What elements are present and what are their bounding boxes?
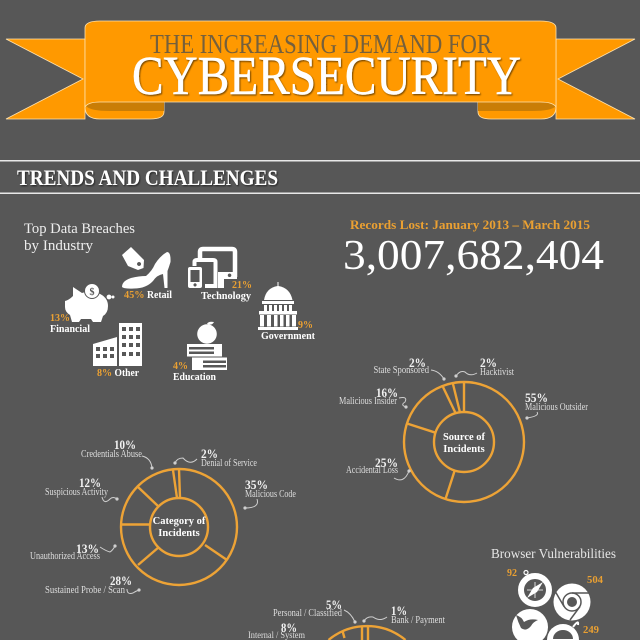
records lost heading: Records Lost: January 2013 – March 2015 [350, 217, 590, 232]
donut: category of incidents: Incidents [158, 528, 200, 539]
donut: third chart cropped at page edge [248, 597, 445, 640]
title banner [6, 21, 635, 119]
label: 2% state sponsored: 2% [409, 355, 426, 370]
label: 2% hacktivist: 2% [480, 355, 497, 370]
heading: top data breaches [24, 221, 135, 254]
heading: top data breaches: Top Data Breaches [24, 221, 135, 237]
label: 13% unauthorized access: 13% [76, 541, 99, 556]
label: 2% denial of service [175, 446, 257, 469]
label: 35% malicious code: Malicious Code [245, 489, 296, 500]
label: 10% credentials abuse [81, 437, 152, 468]
label: 12% suspicious activity: Suspicious Activity [45, 487, 109, 498]
records lost [343, 217, 604, 279]
label: 12% suspicious activity [45, 475, 117, 502]
heading: Browser Vulnerabilities [491, 547, 616, 562]
fold shadows [86, 102, 556, 111]
label: 35% malicious code [245, 477, 296, 508]
label: 2% denial of service: Denial of Service [201, 458, 257, 469]
banner main [85, 21, 556, 107]
label: 1% bank payment: 1% [391, 603, 407, 618]
label: 16% malicious insider: Malicious Insider [339, 396, 397, 407]
label: 55% malicious outsider [525, 390, 588, 418]
label: 5% personal classified: 5% [326, 597, 342, 612]
donut: source of incidents [339, 355, 588, 502]
financial: $ [90, 287, 94, 298]
financial [50, 284, 114, 335]
other label: 8% Other [97, 368, 140, 379]
right fold [478, 100, 556, 119]
icon: safari [521, 570, 549, 604]
label: 28% sustained probe: Sustained Probe / Scan [45, 585, 126, 596]
technology [188, 249, 252, 302]
label: 5% personal classified: Personal / Classified [273, 608, 343, 619]
browser values: 92 [507, 568, 517, 579]
label: 25% accidental loss: Accidental Loss [346, 465, 398, 476]
title line two: CYBERSECURITY [132, 45, 521, 106]
retail [122, 247, 172, 301]
label: 13% unauthorized access: Unauthorized Access [30, 551, 100, 562]
heading: top data breaches: by Industry [24, 238, 93, 254]
label: 8% internal system [248, 620, 306, 640]
icon: apple and books [197, 324, 217, 344]
education: Education [173, 372, 216, 383]
education [173, 322, 227, 383]
label: 16% malicious insider: 16% [376, 385, 398, 400]
browser vulnerabilities [491, 547, 616, 640]
financial labels: 13% [50, 313, 70, 324]
icon: price tag [122, 247, 144, 270]
label: 16% malicious insider [339, 385, 406, 407]
icon: high heel [122, 252, 171, 289]
icon: internet explorer [547, 622, 579, 640]
icon: firefox [512, 609, 548, 640]
title line one: THE INCREASING DEMAND FOR [150, 29, 492, 59]
icon: capitol [264, 282, 292, 300]
education labels: 4% [173, 361, 188, 372]
icon: devices [200, 249, 235, 277]
banner left tail [6, 39, 85, 119]
label: 5% personal classified [273, 597, 355, 622]
label: 8% internal system: 8% [281, 620, 297, 635]
label: 1% bank payment: Bank / Payment [391, 615, 445, 626]
financial: Financial [50, 324, 90, 335]
label: 55% malicious outsider: 55% [525, 390, 548, 405]
technology: Technology [201, 291, 251, 302]
label: 2% state sponsored [374, 355, 444, 379]
icon: chrome [554, 584, 590, 620]
government: Government [261, 331, 316, 342]
label: 1% bank payment [364, 603, 445, 626]
label: 12% suspicious activity: 12% [79, 475, 101, 490]
other [93, 323, 142, 379]
label: 35% malicious code: 35% [245, 477, 268, 492]
government labels: 9% [298, 320, 313, 331]
label: 2% hacktivist: Hacktivist [480, 367, 514, 378]
label: 13% unauthorized access [30, 541, 115, 562]
label: 28% sustained probe: 28% [110, 573, 132, 588]
label: 55% malicious outsider: Malicious Outsider [525, 402, 588, 413]
government [258, 282, 316, 342]
icon: buildings [119, 323, 142, 366]
label: 25% accidental loss [346, 455, 409, 480]
records lost number: 3,007,682,404 [343, 233, 604, 279]
label: 2% state sponsored: State Sponsored [374, 365, 430, 376]
donut centre label: Source of [443, 432, 486, 443]
technology labels: 21% [232, 280, 252, 291]
label: 28% sustained probe [45, 573, 139, 596]
label: 2% hacktivist [456, 355, 514, 378]
left fold [85, 100, 164, 119]
section heading: TRENDS AND CHALLENGES [17, 165, 278, 190]
label: 25% accidental loss: 25% [375, 455, 398, 470]
browser vulnerabilities: 249 [583, 625, 599, 636]
donut: category of incidents [30, 437, 296, 596]
label: 10% credentials abuse: Credentials Abuse [81, 449, 142, 460]
label: 2% denial of service: 2% [201, 446, 218, 461]
donut: source of incidents: Incidents [443, 444, 485, 455]
icon: piggy bank [65, 287, 108, 322]
browser vulnerabilities: 504 [587, 575, 604, 586]
donut centre label: Category of [153, 516, 206, 527]
retail label: 45% Retail [124, 290, 172, 301]
label: 10% credentials abuse: 10% [114, 437, 136, 452]
banner right tail [556, 39, 635, 119]
